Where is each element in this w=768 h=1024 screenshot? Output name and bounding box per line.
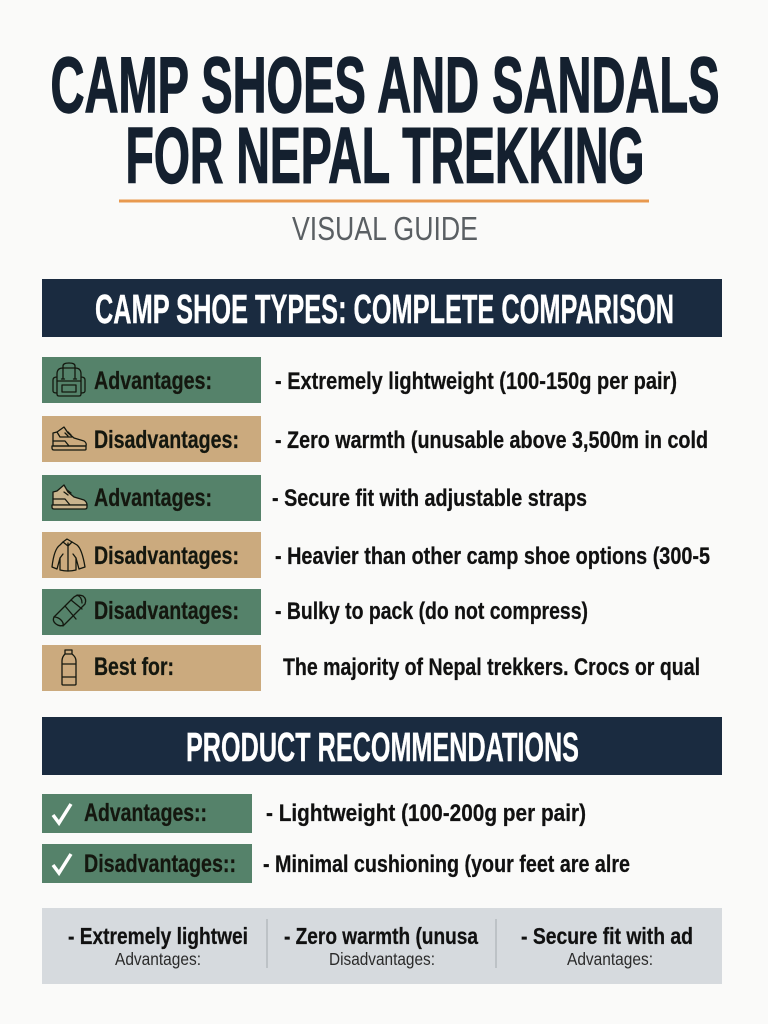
summary column 3: - Secure fit with ad bbox=[521, 923, 693, 949]
row 1: advantages: - Extremely lightweight (100-150g per pair) bbox=[275, 368, 677, 395]
row 2: disadvantages bbox=[42, 416, 708, 462]
summary column 2: - Zero warmth (unusa bbox=[284, 923, 478, 949]
product row 2: disadvantages: - Minimal cushioning (your feet are alre bbox=[263, 851, 630, 878]
product row 1: advantages: Advantages:: bbox=[84, 799, 207, 827]
icon: check mark bbox=[53, 804, 71, 823]
summary column 2: Disadvantages: bbox=[329, 949, 435, 969]
row 4: disadvantages bbox=[42, 532, 710, 578]
row 1: advantages bbox=[42, 357, 677, 403]
row 2: disadvantages: Disadvantages: bbox=[94, 426, 239, 454]
product row 1: advantages bbox=[42, 794, 586, 833]
row 5: disadvantages: Disadvantages: bbox=[94, 597, 239, 625]
subtitle: VISUAL GUIDE bbox=[292, 210, 478, 247]
icon: check mark bbox=[53, 854, 71, 873]
icon: jacket bbox=[52, 539, 85, 571]
row 1: advantages: Advantages: bbox=[94, 367, 212, 395]
icon: rolled sleeping pad bbox=[53, 595, 86, 626]
row 3: advantages: - Secure fit with adjustable straps bbox=[272, 485, 587, 512]
row 6: best for bbox=[42, 645, 700, 691]
product row 1: advantages: - Lightweight (100-200g per pair) bbox=[266, 800, 586, 827]
summary column 2 bbox=[284, 923, 478, 969]
summary panel bbox=[42, 908, 722, 984]
summary column 3: Advantages: bbox=[567, 949, 653, 969]
row 5: disadvantages: - Bulky to pack (do not compress) bbox=[275, 598, 588, 625]
row 5: disadvantages bbox=[42, 589, 588, 635]
icon: hiking shoe bbox=[52, 427, 86, 450]
summary column 1: Advantages: bbox=[115, 949, 201, 969]
icon: backpack bbox=[53, 363, 85, 396]
product row 2: disadvantages: Disadvantages:: bbox=[84, 850, 236, 878]
title bbox=[50, 40, 720, 200]
icon: hiking boot bbox=[52, 485, 87, 509]
summary column 1: - Extremely lightwei bbox=[68, 923, 248, 949]
summary column 1 bbox=[68, 923, 248, 969]
row 4: disadvantages: Disadvantages: bbox=[94, 542, 239, 570]
product row 2: disadvantages bbox=[42, 844, 630, 883]
section banner: camp shoe types bbox=[42, 279, 722, 337]
row 3: advantages bbox=[42, 475, 587, 521]
title underline bbox=[119, 200, 649, 202]
summary column 3 bbox=[521, 923, 693, 969]
section banner: product recommendations bbox=[42, 717, 722, 775]
row 6: best for: Best for: bbox=[94, 653, 174, 681]
icon: water bottle bbox=[62, 650, 76, 685]
row 3: advantages: Advantages: bbox=[94, 484, 212, 512]
